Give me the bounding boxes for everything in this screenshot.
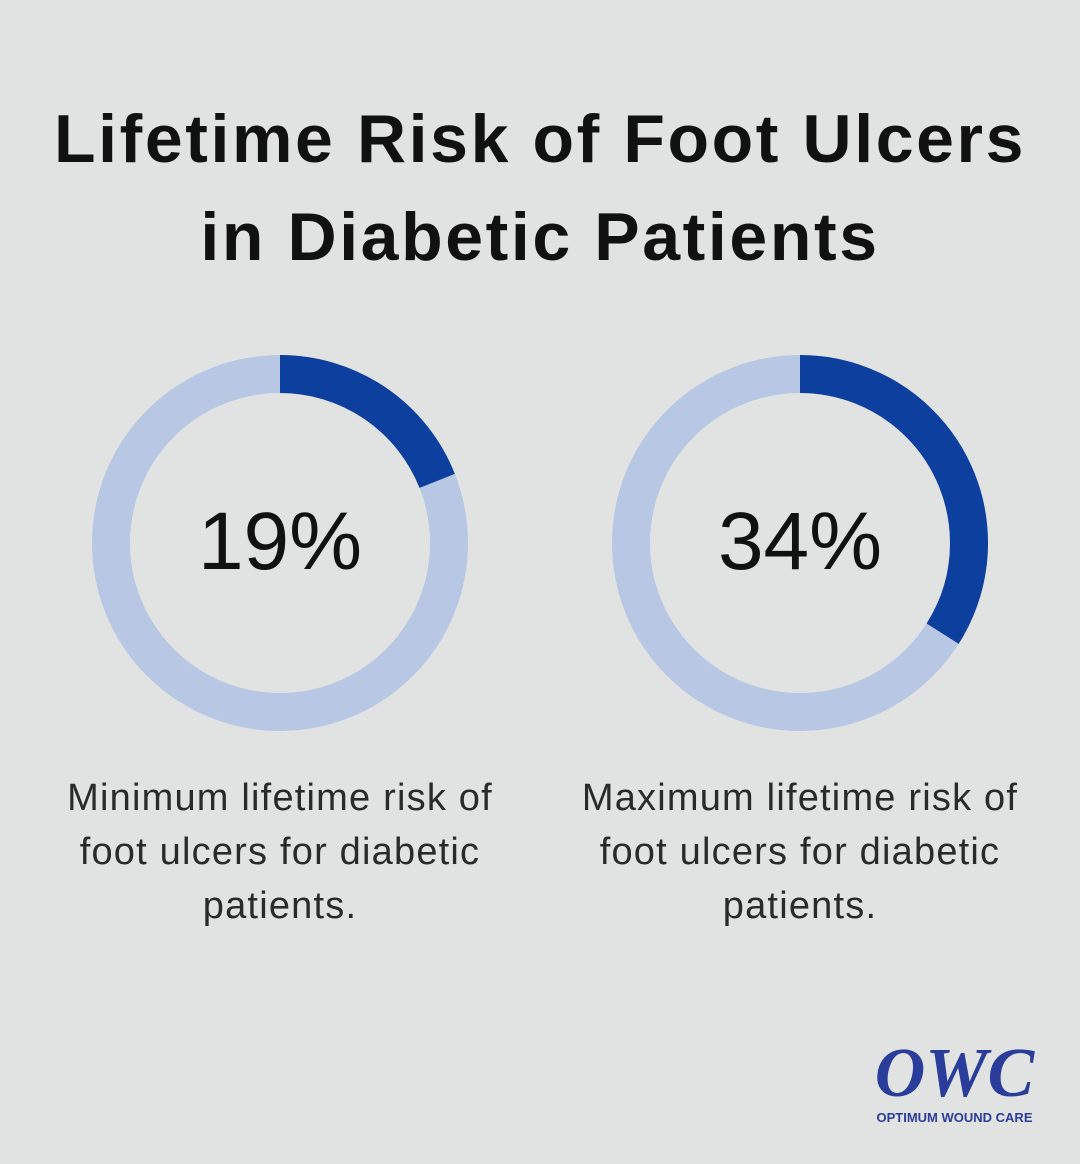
donut: 34% bbox=[612, 355, 988, 731]
title: Lifetime Risk of Foot Ulcers bbox=[54, 101, 1026, 177]
logo: OWC bbox=[875, 1035, 1034, 1112]
logo: OPTIMUM WOUND CARE bbox=[876, 1110, 1032, 1125]
caption right: Maximum lifetime risk of foot ulcers for diabetic patients. bbox=[582, 777, 1018, 927]
donut: 19% bbox=[92, 355, 468, 731]
caption left: Minimum lifetime risk of foot ulcers for diabetic patients. bbox=[67, 777, 493, 927]
donut: 34%: 34% bbox=[718, 496, 882, 587]
title bbox=[54, 101, 1026, 275]
title: in Diabetic Patients bbox=[200, 199, 880, 275]
donut: 19%: 19% bbox=[198, 496, 362, 587]
